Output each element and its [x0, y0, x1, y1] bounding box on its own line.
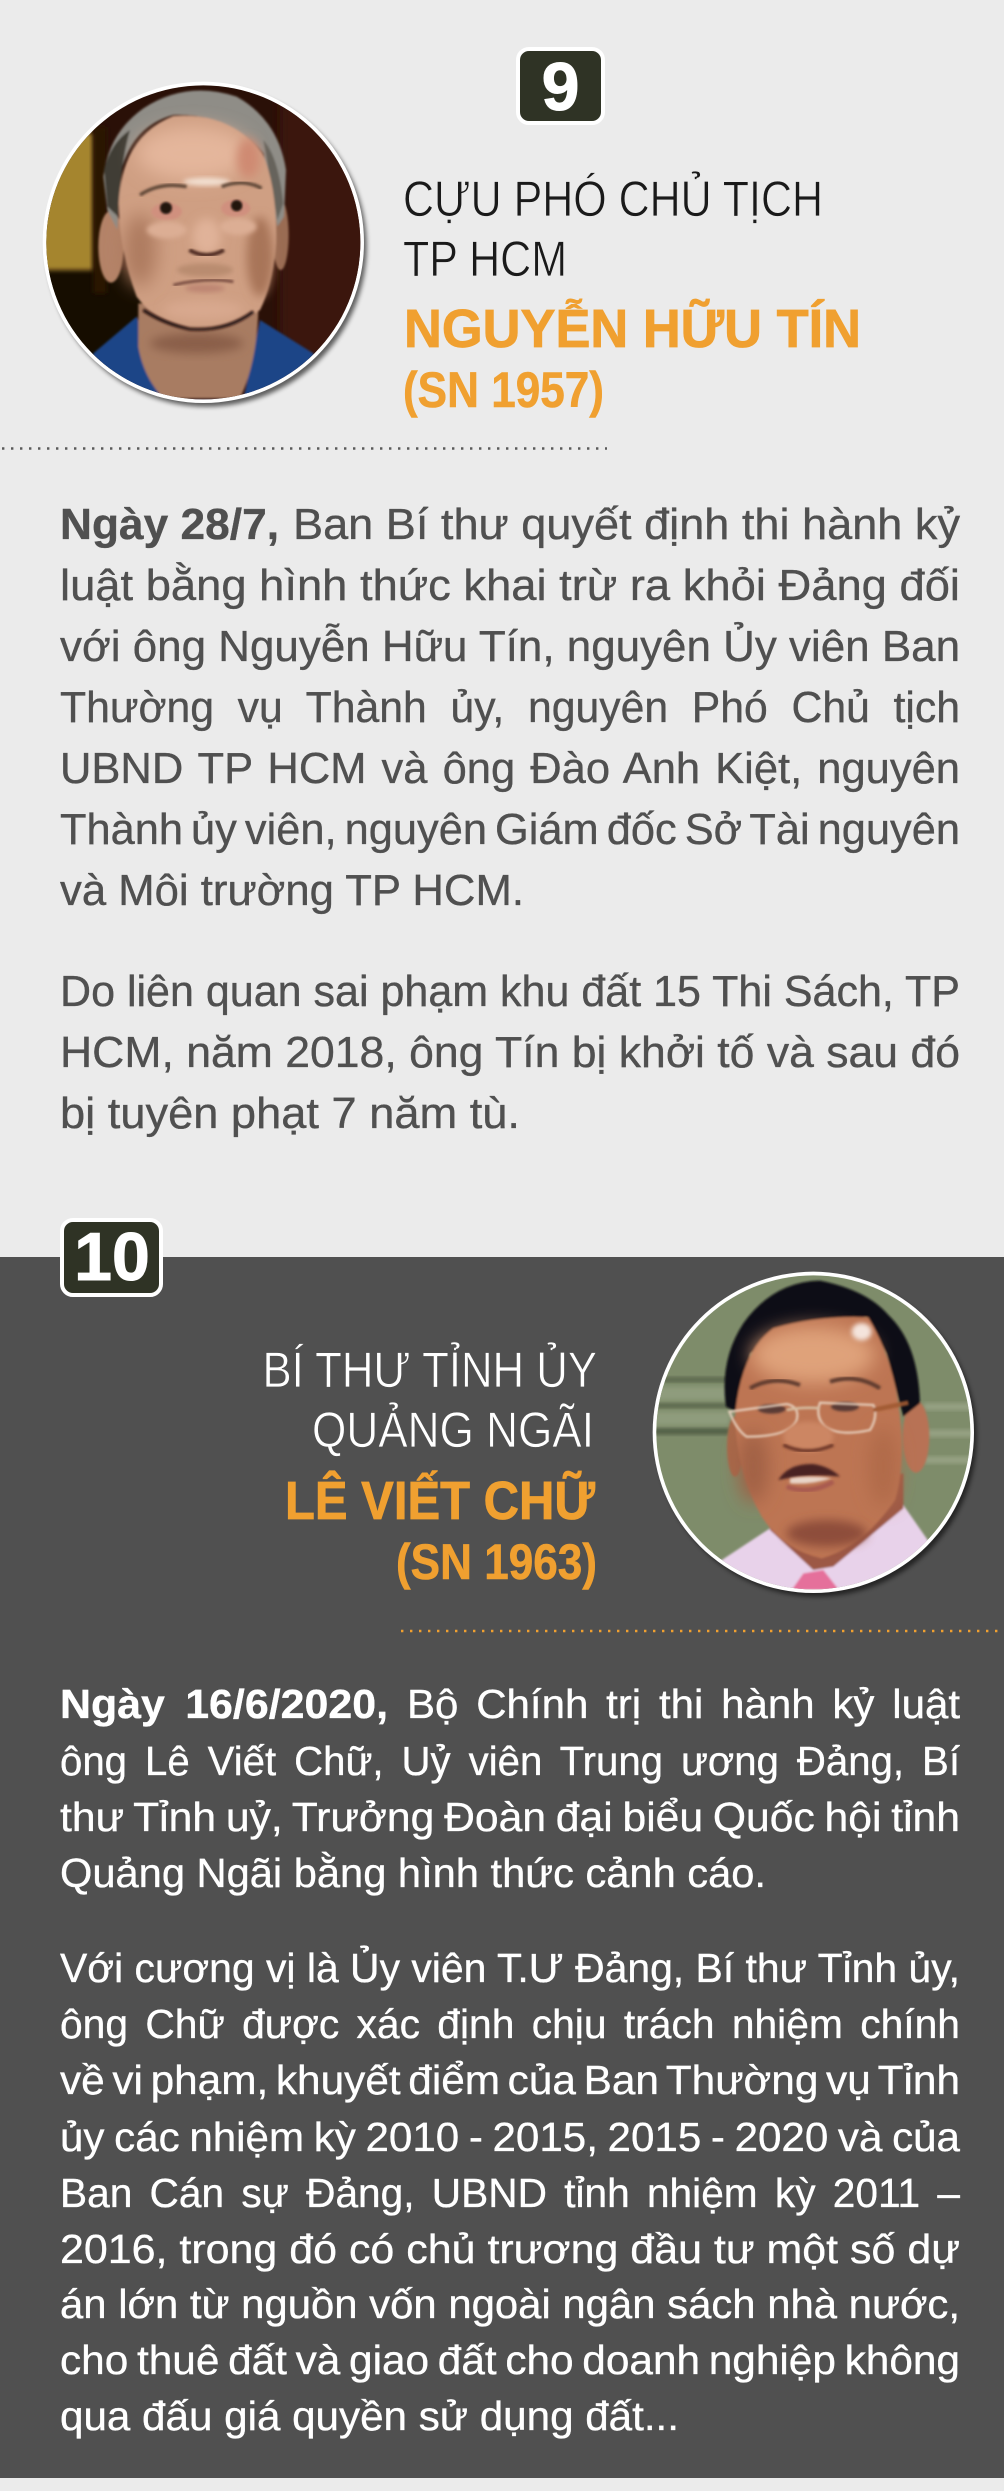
- eyes: [758, 1404, 786, 1414]
- badge: number 9: 9: [542, 49, 579, 125]
- text block: person 10 paragraph 2: ủy các nhiệm kỳ 2010 - 2015, 2015 - 2020 và của: [60, 2114, 960, 2160]
- heading: person 10: [262, 1341, 597, 1590]
- text block: person 9 paragraph 1: và Môi trường TP HCM.: [60, 867, 524, 915]
- hair: [103, 90, 286, 230]
- heading: person 9: (SN 1957): [403, 362, 604, 418]
- text block: person 10 paragraph 2: Ban Cán sự Đảng, UBND tỉnh nhiệm kỳ 2011 –: [60, 2170, 960, 2216]
- text block: person 10 paragraph 1: ông Lê Viết Chữ, Uỷ viên Trung ương Đảng, Bí: [60, 1738, 961, 1784]
- text block: person 10 paragraph 2: qua đấu giá quyền sử dụng đất...: [60, 2393, 679, 2439]
- text block: person 9 paragraph 1: Ngày 28/7,: [60, 501, 279, 549]
- text block: person 9 paragraph 1: luật bằng hình thức khai trừ ra khỏi Đảng đối: [60, 561, 960, 610]
- heading: person 9: TP HCM: [403, 231, 567, 287]
- shirt: [720, 1504, 928, 1590]
- glasses: [729, 1403, 908, 1437]
- panel: dark section 10: [0, 1257, 1004, 2478]
- text block: person 10 paragraph 2: ông Chữ được xác định chịu trách nhiệm chính: [60, 2001, 960, 2047]
- portrait: Nguyễn Hữu Tín: [42, 82, 370, 410]
- text block: person 9 paragraph 1: Thành ủy viên, nguyên Giám đốc Sở Tài nguyên: [60, 806, 960, 854]
- neck: [138, 303, 258, 398]
- text block: person 10 paragraph 1: Bộ Chính trị thi hành kỷ luật: [407, 1681, 961, 1727]
- neck: [767, 1473, 903, 1570]
- nose: [193, 218, 221, 255]
- text block: person 10 paragraph 1: [60, 1681, 961, 1896]
- heading: person 10: (SN 1963): [396, 1534, 597, 1590]
- brows: [140, 185, 187, 195]
- heading: person 9: CỰU PHÓ CHỦ TỊCH: [403, 170, 823, 227]
- heading: person 9: NGUYỄN HỮU TÍN: [404, 298, 861, 359]
- ears: [98, 211, 124, 283]
- heading: person 10: LÊ VIẾT CHỮ: [285, 1470, 595, 1531]
- text block: person 9 paragraph 1: [60, 501, 960, 915]
- tie: [792, 1570, 839, 1590]
- text block: person 10 paragraph 2: Với cương vị là Ủy viên T.Ư Đảng, Bí thư Tỉnh ủy,: [60, 1945, 960, 1991]
- text block: person 9 paragraph 1: Thường vụ Thành ủy, nguyên Phó Chủ tịch: [60, 684, 960, 732]
- ears: [903, 1401, 929, 1473]
- text block: person 10 paragraph 1: Ngày 16/6/2020,: [60, 1681, 388, 1727]
- text block: person 10 paragraph 1: Quảng Ngãi bằng hình thức cảnh cáo.: [60, 1850, 766, 1896]
- eyes: [152, 204, 182, 220]
- text block: person 9 paragraph 1: với ông Nguyễn Hữu Tín, nguyên Ủy viên Ban: [60, 620, 960, 671]
- heading: person 10: QUẢNG NGÃI: [312, 1402, 594, 1458]
- brows: [750, 1381, 800, 1388]
- jaw shadow: [143, 310, 253, 330]
- text block: person 10 paragraph 2: [60, 1945, 960, 2439]
- mouth: [778, 1464, 840, 1480]
- text block: person 10 paragraph 2: về vi phạm, khuyết điểm của Ban Thường vụ Tỉnh: [60, 2057, 960, 2103]
- badge: number 9: [518, 49, 603, 125]
- text block: person 10 paragraph 2: án lớn từ nguồn vốn ngoài ngân sách nhà nước,: [60, 2281, 960, 2327]
- hair: [725, 1281, 920, 1417]
- text block: person 9 paragraph 1: UBND TP HCM và ông Đào Anh Kiệt, nguyên: [60, 745, 960, 793]
- nose: [783, 1422, 833, 1452]
- portrait: Lê Viết Chữ: [652, 1272, 978, 1598]
- face: [119, 116, 276, 329]
- text block: person 9 paragraph 2: [60, 968, 960, 1138]
- heading: person 10: BÍ THƯ TỈNH ỦY: [262, 1341, 597, 1398]
- text block: person 9 paragraph 1: Ban Bí thư quyết định thi hành kỷ: [293, 501, 960, 549]
- text block: person 10 paragraph 2: 2016, trong đó có chủ trương đầu tư một số dự: [60, 2226, 960, 2272]
- mouth: [177, 263, 233, 277]
- heading: person 9: [403, 170, 861, 418]
- badge: number 10: 10: [74, 1219, 150, 1295]
- text block: person 9 paragraph 2: Do liên quan sai phạm khu đất 15 Thi Sách, TP: [60, 968, 960, 1016]
- face: [735, 1317, 902, 1558]
- text block: person 9 paragraph 2: HCM, năm 2018, ông Tín bị khởi tố và sau đó: [60, 1029, 960, 1077]
- text block: person 10 paragraph 1: thư Tỉnh uỷ, Trưởng Đoàn đại biểu Quốc hội tỉnh: [60, 1794, 960, 1840]
- text block: person 10 paragraph 2: cho thuê đất và giao đất cho doanh nghiệp không: [60, 2337, 960, 2383]
- shirt: [92, 316, 314, 400]
- text block: person 9 paragraph 2: bị tuyên phạt 7 năm tù.: [60, 1090, 520, 1138]
